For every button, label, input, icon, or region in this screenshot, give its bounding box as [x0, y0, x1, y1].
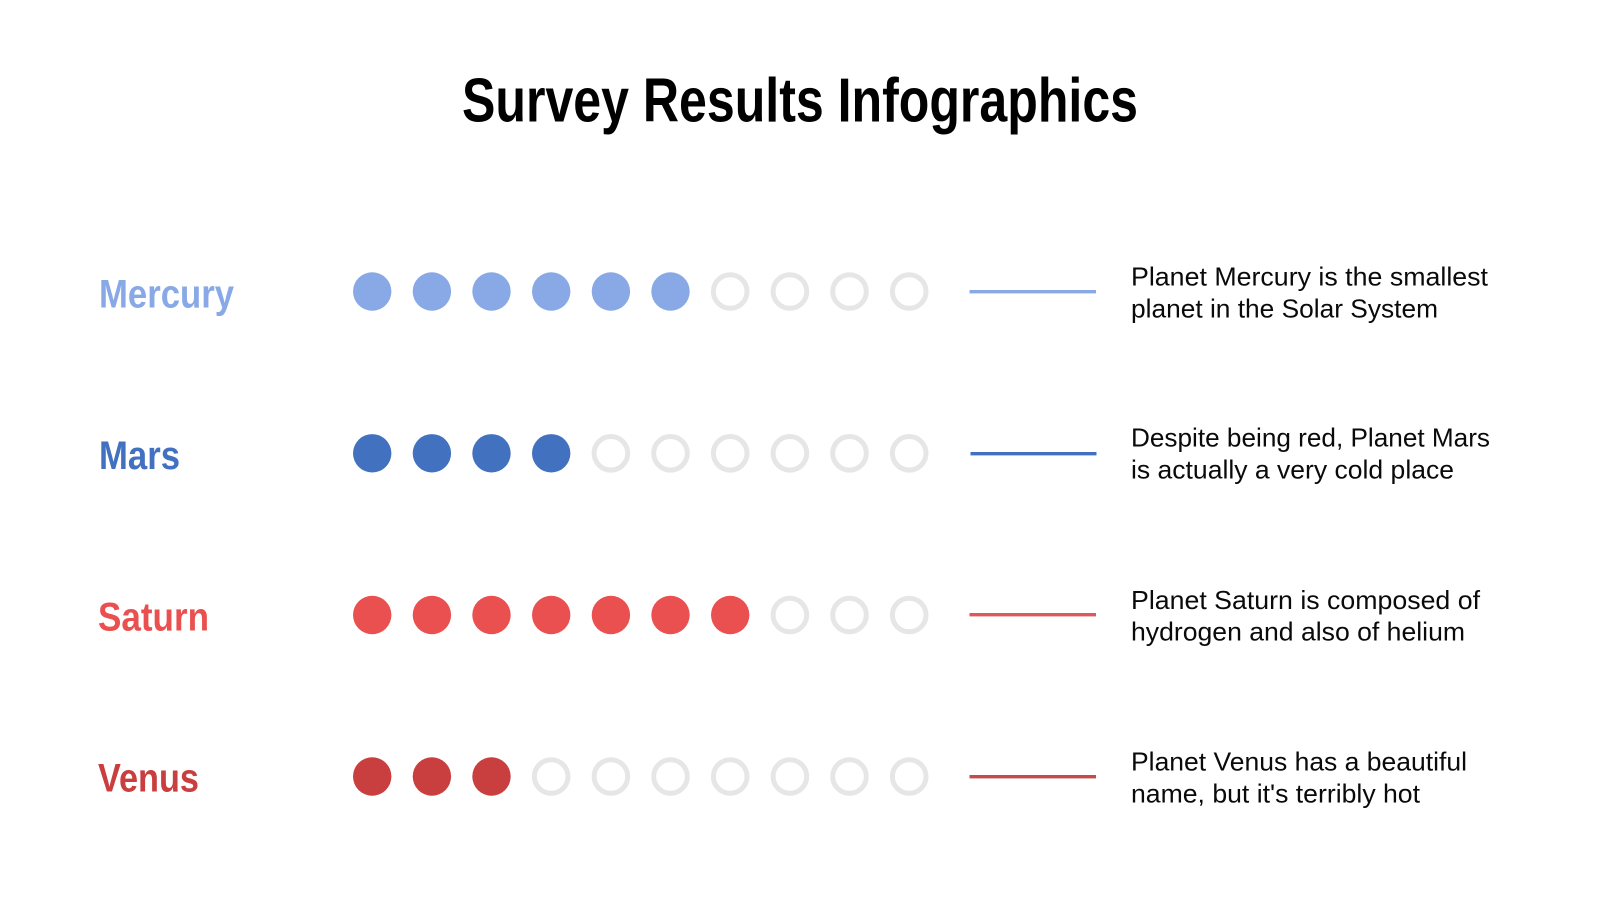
description: Mercury: Planet Mercury is the smallest	[1131, 262, 1489, 292]
connector line: Mars	[970, 452, 1096, 455]
label: Mars: Mars	[99, 434, 180, 478]
panel: Mars row	[99, 423, 1490, 484]
label: Mercury: Mercury	[99, 272, 235, 316]
description: Venus	[1131, 747, 1467, 808]
title: Survey Results Infographics	[462, 66, 1138, 136]
panel: Saturn row	[98, 585, 1481, 647]
description: Mars: Despite being red, Planet Mars	[1131, 423, 1490, 453]
label: Saturn: Saturn	[98, 596, 209, 640]
connector line: Mercury	[970, 290, 1096, 293]
description: Venus: name, but it's terribly hot	[1131, 778, 1421, 808]
label: Venus: Venus	[98, 756, 199, 800]
description: Mars	[1131, 423, 1490, 484]
panel: Venus row	[98, 747, 1467, 808]
description: Saturn: hydrogen and also of helium	[1131, 617, 1465, 647]
description: Venus: Planet Venus has a beautiful	[1131, 747, 1467, 777]
description: Mars: is actually a very cold place	[1131, 454, 1454, 484]
dot rating: Saturn 7 of 10	[353, 596, 926, 634]
description: Mercury: planet in the Solar System	[1131, 293, 1438, 323]
panel: Mercury row	[99, 262, 1489, 323]
dot rating: Mercury 6 of 10	[353, 272, 926, 311]
connector line: Venus	[970, 775, 1096, 778]
dot rating: Mars 4 of 10	[353, 434, 926, 472]
description: Mercury	[1131, 262, 1489, 323]
description: Saturn: Planet Saturn is composed of	[1131, 585, 1481, 615]
dot rating: Venus 3 of 10	[353, 757, 926, 796]
description: Saturn	[1131, 585, 1481, 647]
connector line: Saturn	[970, 613, 1096, 616]
